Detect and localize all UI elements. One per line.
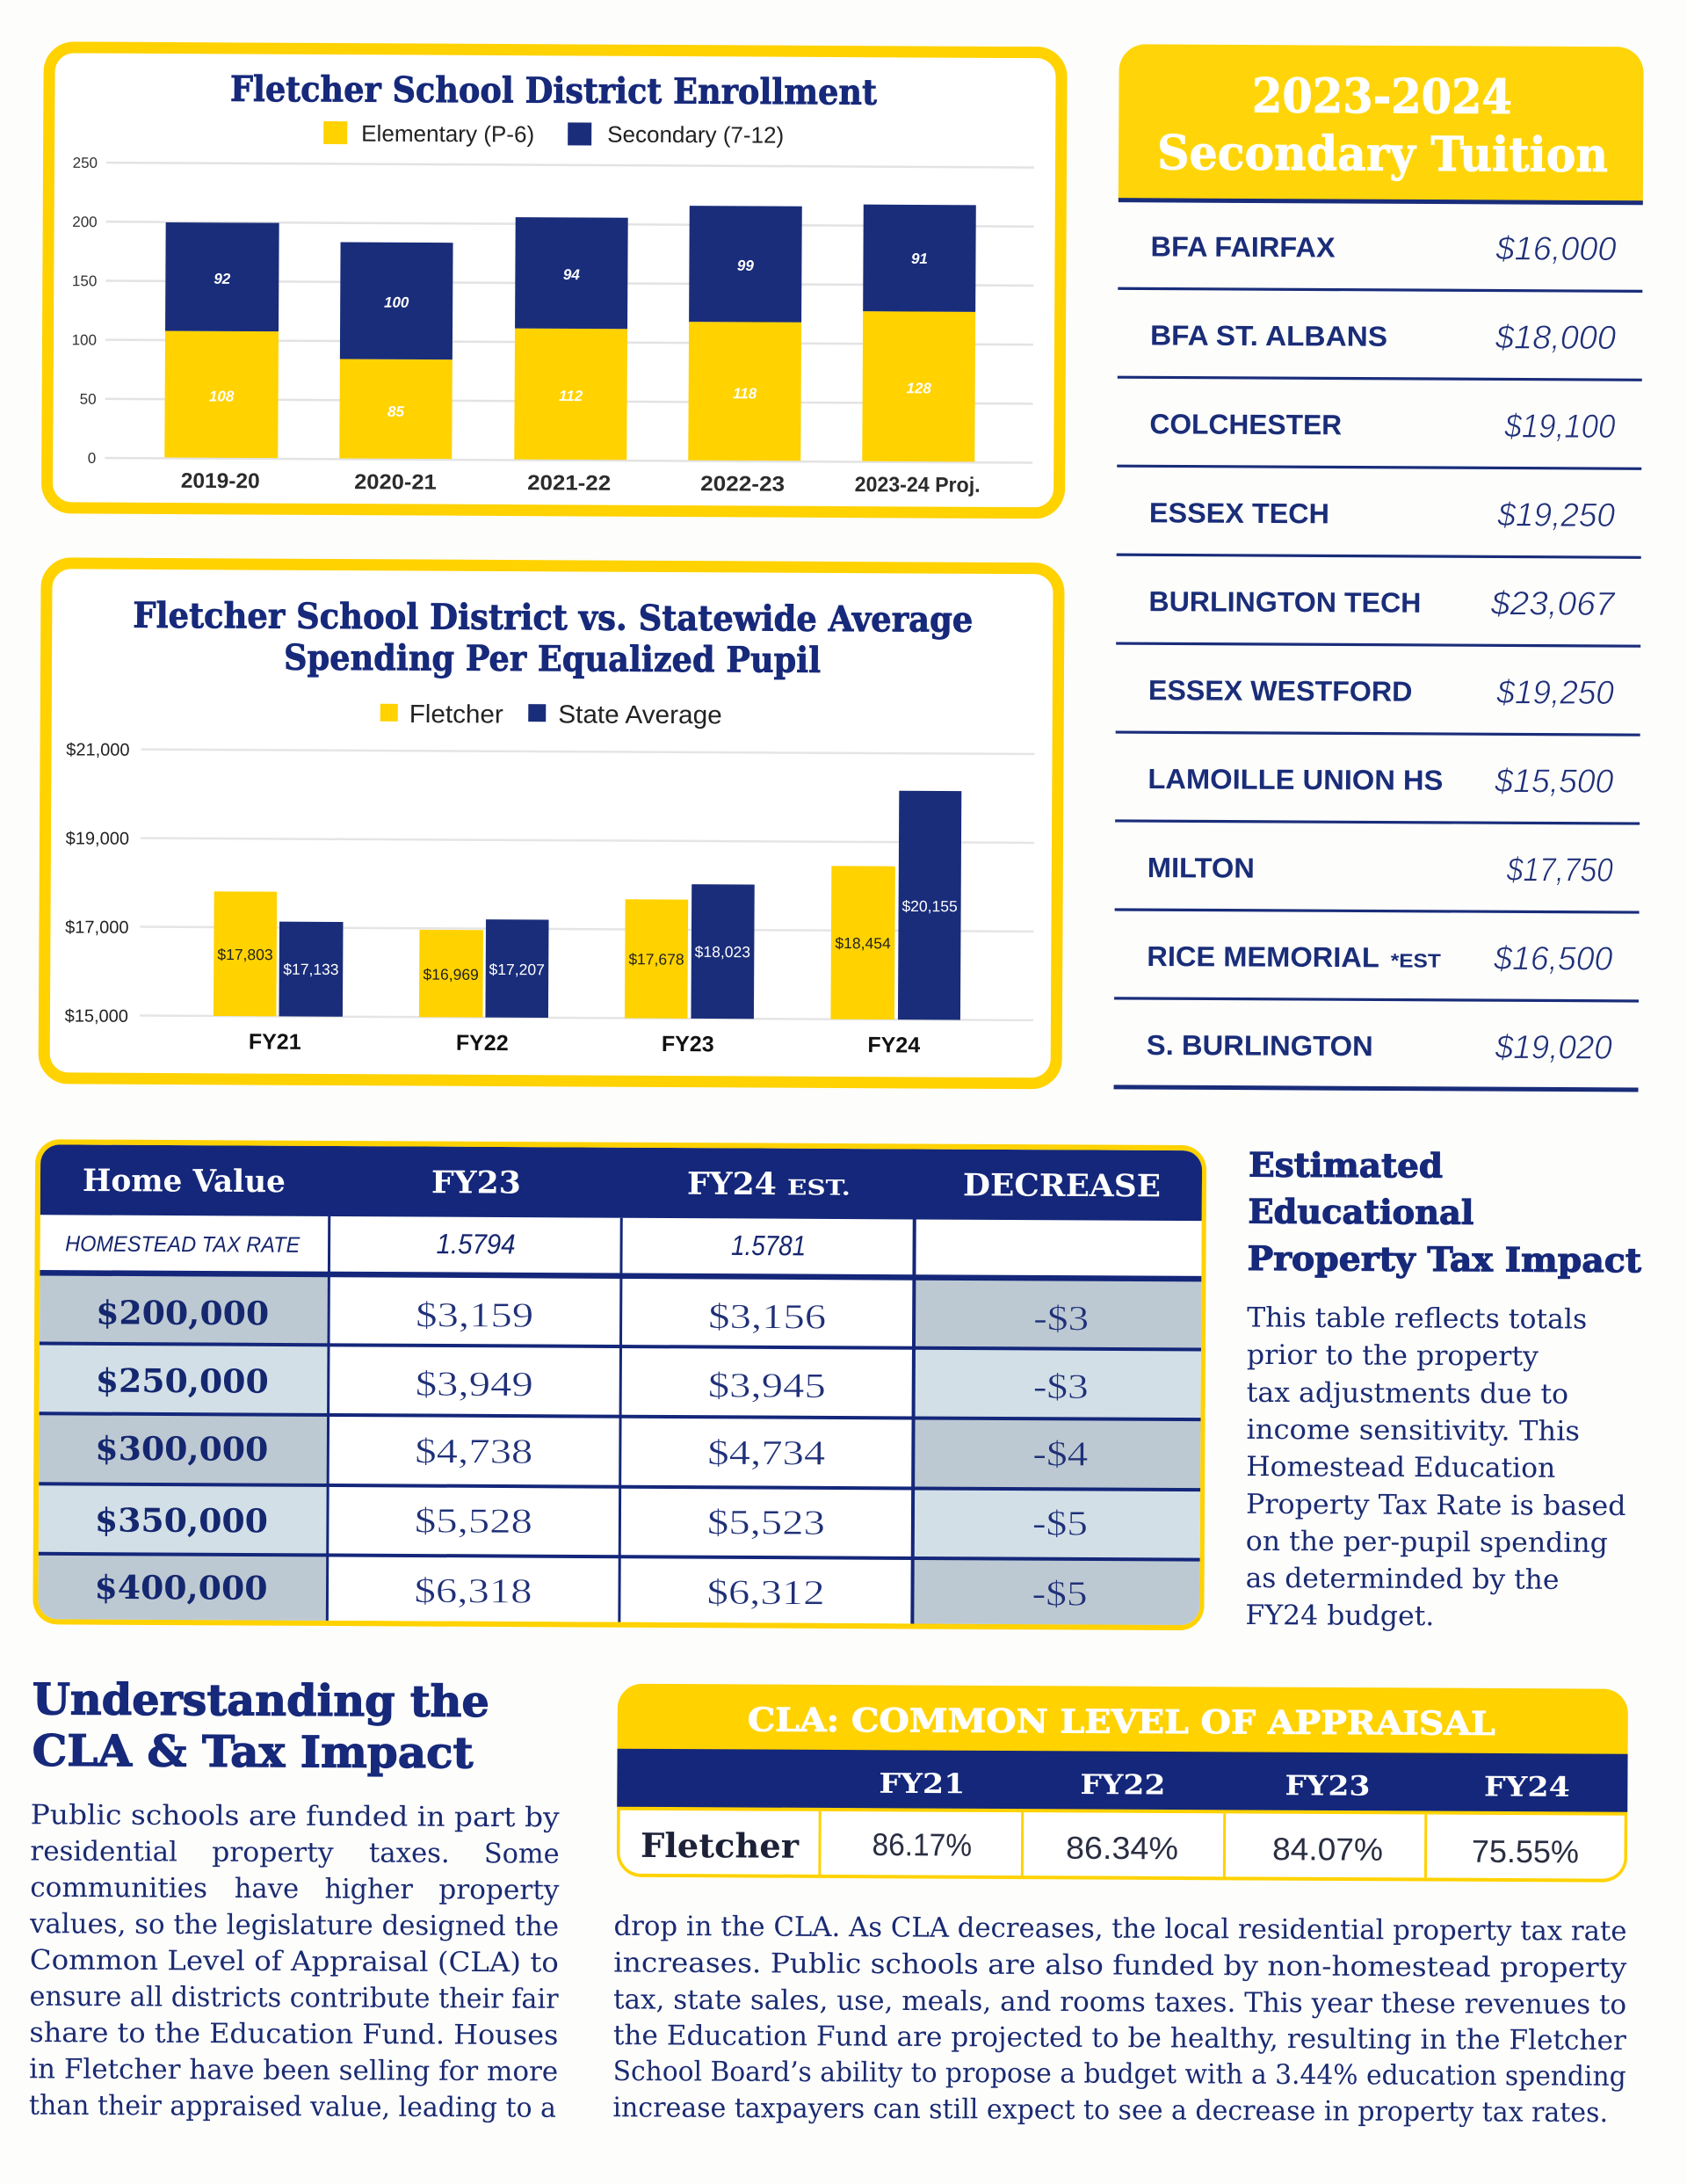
grouped bar chart: spending: FY23 bbox=[662, 1032, 714, 1056]
text block: CLA explanation left column bbox=[28, 1799, 560, 2124]
heading: understanding the CLA bbox=[32, 1673, 489, 1778]
legend: spending: Fletcher bbox=[409, 700, 503, 729]
table data rows: -$4 bbox=[1032, 1433, 1088, 1474]
text block: tax impact explanation: as determinded by the bbox=[1246, 1563, 1560, 1596]
CLA Fletcher row: 75.55% bbox=[1472, 1833, 1579, 1869]
tuition rows: BFA FAIRFAX bbox=[1150, 230, 1336, 263]
table data rows: $400,000 bbox=[94, 1568, 268, 1607]
panel: enrollment chart bbox=[47, 47, 1061, 513]
legend: enrollment: Elementary (P-6) bbox=[361, 120, 534, 148]
legend: spending bbox=[380, 700, 722, 730]
panel: CLA table bbox=[617, 1684, 1628, 1883]
text block: CLA explanation left column: have bbox=[235, 1873, 299, 1905]
stacked bar chart: enrollment: 150 bbox=[72, 272, 97, 289]
table data rows: $6,312 bbox=[706, 1572, 825, 1612]
tuition rows: $19,100 bbox=[1503, 408, 1616, 446]
text block: CLA explanation right column: tax, state sales, use, meals, and rooms taxes. This year these revenues to bbox=[613, 1984, 1626, 2021]
legend: spending: State Average bbox=[558, 700, 722, 729]
text block: CLA explanation right column: drop in the CLA. As CLA decreases, the local residential property tax rate bbox=[613, 1911, 1627, 1948]
stacked bar chart: enrollment: 94 bbox=[563, 266, 580, 283]
stacked bar chart: enrollment: 50 bbox=[80, 391, 97, 408]
stacked bar chart: enrollment: 85 bbox=[387, 403, 405, 420]
table data rows: $6,318 bbox=[414, 1571, 532, 1611]
heading: estimated tax impact: Estimated bbox=[1249, 1144, 1443, 1186]
stacked bar chart: enrollment: 128 bbox=[906, 380, 931, 396]
tuition rows: MILTON bbox=[1148, 852, 1255, 884]
table data rows: $200,000 bbox=[96, 1293, 269, 1332]
grouped bar chart: spending: $19,000 bbox=[66, 829, 129, 849]
tuition rows: ESSEX TECH bbox=[1149, 497, 1329, 529]
homestead tax rate row bbox=[65, 1226, 806, 1261]
text block: CLA explanation left column: communities bbox=[30, 1872, 207, 1905]
CLA year headers: FY21 bbox=[879, 1768, 965, 1800]
text block: tax impact explanation: This table reflects totals bbox=[1247, 1302, 1587, 1335]
stacked bar chart: enrollment: 2022-23 bbox=[700, 472, 785, 497]
stacked bar chart: enrollment: 2019-20 bbox=[181, 469, 260, 493]
text block: CLA explanation right column: the Education Fund are projected to be healthy, resulting in the Fletcher bbox=[613, 2020, 1626, 2057]
grouped bar chart: spending: $18,454 bbox=[835, 934, 891, 952]
stacked bar chart: enrollment: 100 bbox=[72, 331, 97, 349]
table data rows: -$3 bbox=[1033, 1298, 1089, 1338]
text block: tax impact explanation: prior to the property bbox=[1247, 1339, 1539, 1373]
stacked bar chart: enrollment: 100 bbox=[384, 294, 409, 311]
homestead tax rate row: HOMESTEAD TAX RATE bbox=[65, 1231, 300, 1258]
text block: CLA explanation left column: Common Level of Appraisal (CLA) to bbox=[30, 1944, 559, 1979]
grouped bar chart: spending: $17,000 bbox=[65, 918, 129, 938]
table header row: FY23 bbox=[431, 1165, 521, 1201]
grouped bar chart: spending: $21,000 bbox=[66, 740, 130, 760]
tuition rows: *EST bbox=[1391, 949, 1441, 972]
text block: CLA explanation right column: increase taxpayers can still expect to see a decrease in property tax rates. bbox=[612, 2092, 1608, 2129]
text block: CLA explanation right column: increases. Public schools are also funded by non-homestead property bbox=[613, 1947, 1627, 1984]
table data rows: $350,000 bbox=[95, 1500, 268, 1540]
legend: enrollment: Secondary (7-12) bbox=[607, 121, 784, 149]
stacked bar chart: enrollment: 108 bbox=[209, 388, 235, 405]
homestead tax rate row: 1.5794 bbox=[437, 1228, 516, 1260]
table data rows: $250,000 bbox=[96, 1361, 269, 1401]
homestead tax rate row: 1.5781 bbox=[731, 1230, 806, 1261]
stacked bar chart: enrollment: 2023-24 Proj. bbox=[855, 473, 981, 497]
heading: spending per pupil bbox=[133, 595, 973, 682]
text block: CLA explanation left column: ensure all districts contribute their fair bbox=[30, 1981, 559, 2015]
text block: CLA explanation left column: in Fletcher have been selling for more bbox=[29, 2053, 558, 2087]
heading: estimated tax impact: Property Tax Impact bbox=[1247, 1238, 1642, 1280]
text block: CLA explanation left column: Some bbox=[484, 1838, 560, 1870]
tuition rows: $16,500 bbox=[1493, 940, 1612, 978]
table data rows: $4,738 bbox=[415, 1431, 532, 1471]
tuition rows bbox=[1114, 229, 1643, 1090]
tuition header bbox=[1119, 44, 1644, 205]
tuition rows: RICE MEMORIAL bbox=[1147, 940, 1379, 973]
grouped bar chart: spending: FY22 bbox=[456, 1031, 509, 1056]
table data rows: -$5 bbox=[1032, 1573, 1088, 1614]
stacked bar chart: enrollment: 0 bbox=[88, 450, 96, 467]
CLA year headers: FY23 bbox=[1285, 1770, 1370, 1803]
text block: tax impact explanation bbox=[1245, 1302, 1627, 1633]
text block: CLA explanation left column: property bbox=[212, 1837, 334, 1868]
legend: enrollment bbox=[323, 120, 784, 149]
table data rows: $3,156 bbox=[708, 1296, 826, 1337]
table header row: DECREASE bbox=[963, 1167, 1161, 1204]
stacked bar chart: enrollment: 2020-21 bbox=[354, 470, 437, 495]
stacked bar chart: enrollment: 118 bbox=[733, 385, 757, 402]
text block: CLA explanation left column: residential bbox=[30, 1836, 177, 1868]
CLA Fletcher row: 84.07% bbox=[1272, 1831, 1383, 1868]
tuition rows: $19,020 bbox=[1495, 1029, 1612, 1067]
stacked bar chart: enrollment: 112 bbox=[559, 388, 583, 404]
stacked bar chart: enrollment: 91 bbox=[911, 250, 928, 267]
heading: understanding the CLA: Understanding the bbox=[33, 1673, 489, 1727]
text block: tax impact explanation: income sensitivity. This bbox=[1246, 1414, 1580, 1448]
tuition rows: $23,067 bbox=[1490, 585, 1616, 623]
CLA Fletcher row: 86.17% bbox=[872, 1826, 972, 1863]
tuition rows: BFA ST. ALBANS bbox=[1150, 319, 1387, 352]
panel: property tax table bbox=[33, 1139, 1206, 1630]
table header row: EST. bbox=[787, 1174, 851, 1201]
tuition rows: $18,000 bbox=[1495, 319, 1616, 357]
grouped bar chart: spending: $17,207 bbox=[489, 961, 545, 978]
table data rows: $3,949 bbox=[416, 1363, 533, 1404]
heading: spending per pupil: Fletcher School District vs. Statewide Average bbox=[133, 595, 973, 641]
text block: tax impact explanation: Property Tax Rate is based bbox=[1246, 1489, 1626, 1522]
table data rows: $5,528 bbox=[415, 1500, 532, 1541]
tuition rows: COLCHESTER bbox=[1149, 408, 1342, 440]
grouped bar chart: spending: $20,155 bbox=[901, 897, 958, 915]
text block: CLA explanation left column: share to the Education Fund. Houses bbox=[29, 2017, 558, 2051]
stacked bar chart: enrollment bbox=[71, 155, 1034, 497]
text block: CLA explanation right column: School Board’s ability to propose a budget with a 3.44% education spending bbox=[613, 2056, 1626, 2093]
text block: tax impact explanation: tax adjustments due to bbox=[1247, 1377, 1568, 1411]
grouped bar chart: spending bbox=[64, 740, 1035, 1058]
table data rows: $3,945 bbox=[708, 1365, 826, 1405]
grouped bar chart: spending: $16,969 bbox=[424, 966, 479, 983]
tuition rows: $19,250 bbox=[1495, 674, 1614, 712]
tuition rows: $17,750 bbox=[1506, 852, 1613, 889]
stacked bar chart: enrollment: 200 bbox=[72, 214, 98, 230]
heading: enrollment: Fletcher School District Enrollment bbox=[230, 69, 878, 113]
table data rows: -$3 bbox=[1033, 1367, 1089, 1406]
text block: tax impact explanation: on the per-pupil spending bbox=[1246, 1526, 1608, 1559]
tuition rows: ESSEX WESTFORD bbox=[1148, 674, 1412, 707]
heading: estimated tax impact: Educational bbox=[1248, 1191, 1474, 1232]
CLA year headers bbox=[879, 1768, 1570, 1803]
heading: estimated tax impact bbox=[1247, 1144, 1642, 1280]
tuition rows: LAMOILLE UNION HS bbox=[1148, 763, 1443, 796]
grouped bar chart: spending: $17,803 bbox=[217, 946, 273, 963]
table header row: FY24 bbox=[687, 1166, 777, 1202]
text block: tax impact explanation: Homestead Education bbox=[1246, 1451, 1555, 1484]
grouped bar chart: spending: FY21 bbox=[249, 1029, 301, 1055]
table data rows: -$5 bbox=[1032, 1503, 1088, 1543]
text block: CLA explanation right column bbox=[612, 1911, 1627, 2129]
heading: spending per pupil: Spending Per Equalized Pupil bbox=[284, 637, 821, 681]
CLA Fletcher row: Fletcher bbox=[641, 1825, 800, 1866]
tuition rows: BURLINGTON TECH bbox=[1148, 585, 1422, 619]
tuition rows: $16,000 bbox=[1495, 230, 1617, 268]
grouped bar chart: spending: $17,678 bbox=[628, 950, 684, 969]
text block: CLA explanation left column: Public schools are funded in part by bbox=[31, 1799, 560, 1833]
text block: CLA explanation left column: than their appraised value, leading to a bbox=[29, 2090, 556, 2124]
CLA year headers: FY22 bbox=[1080, 1769, 1165, 1801]
stacked bar chart: enrollment: 92 bbox=[214, 271, 231, 287]
grouped bar chart: spending: $18,023 bbox=[695, 943, 750, 961]
text block: CLA explanation left column: values, so the legislature designed the bbox=[29, 1908, 559, 1942]
text block: CLA explanation left column: higher bbox=[324, 1874, 413, 1905]
stacked bar chart: enrollment: 2021-22 bbox=[527, 471, 611, 496]
panel: spending per pupil chart bbox=[44, 563, 1059, 1084]
text block: CLA explanation left column: taxes. bbox=[369, 1838, 450, 1869]
table data rows: $5,523 bbox=[707, 1502, 825, 1542]
tuition rows: S. BURLINGTON bbox=[1147, 1029, 1373, 1062]
table header row bbox=[83, 1163, 1161, 1204]
table data rows bbox=[94, 1293, 1089, 1614]
text block: CLA explanation left column: property bbox=[438, 1874, 560, 1906]
tuition header: 2023-2024 bbox=[1252, 67, 1512, 125]
CLA Fletcher row: 86.34% bbox=[1066, 1830, 1178, 1866]
table data rows: $4,734 bbox=[707, 1433, 825, 1473]
grouped bar chart: spending: $17,133 bbox=[283, 961, 339, 978]
stacked bar chart: enrollment: 250 bbox=[73, 155, 98, 171]
heading: understanding the CLA: CLA & Tax Impact bbox=[32, 1725, 474, 1778]
tuition rows: $15,500 bbox=[1494, 763, 1613, 801]
table data rows: $3,159 bbox=[416, 1295, 533, 1335]
CLA year headers: FY24 bbox=[1484, 1771, 1570, 1803]
CLA title: CLA: COMMON LEVEL OF APPRAISAL bbox=[748, 1700, 1495, 1743]
grouped bar chart: spending: FY24 bbox=[867, 1033, 920, 1057]
tuition rows: $19,250 bbox=[1496, 497, 1615, 534]
stacked bar chart: enrollment: 99 bbox=[737, 258, 754, 274]
CLA Fletcher row bbox=[641, 1825, 1579, 1869]
panel: secondary tuition bbox=[1114, 44, 1644, 1090]
text block: tax impact explanation: FY24 budget. bbox=[1245, 1600, 1434, 1632]
tuition header: Secondary Tuition bbox=[1157, 124, 1608, 183]
table data rows: $300,000 bbox=[95, 1429, 268, 1469]
grouped bar chart: spending: $15,000 bbox=[65, 1006, 128, 1027]
table header row: Home Value bbox=[83, 1163, 286, 1200]
